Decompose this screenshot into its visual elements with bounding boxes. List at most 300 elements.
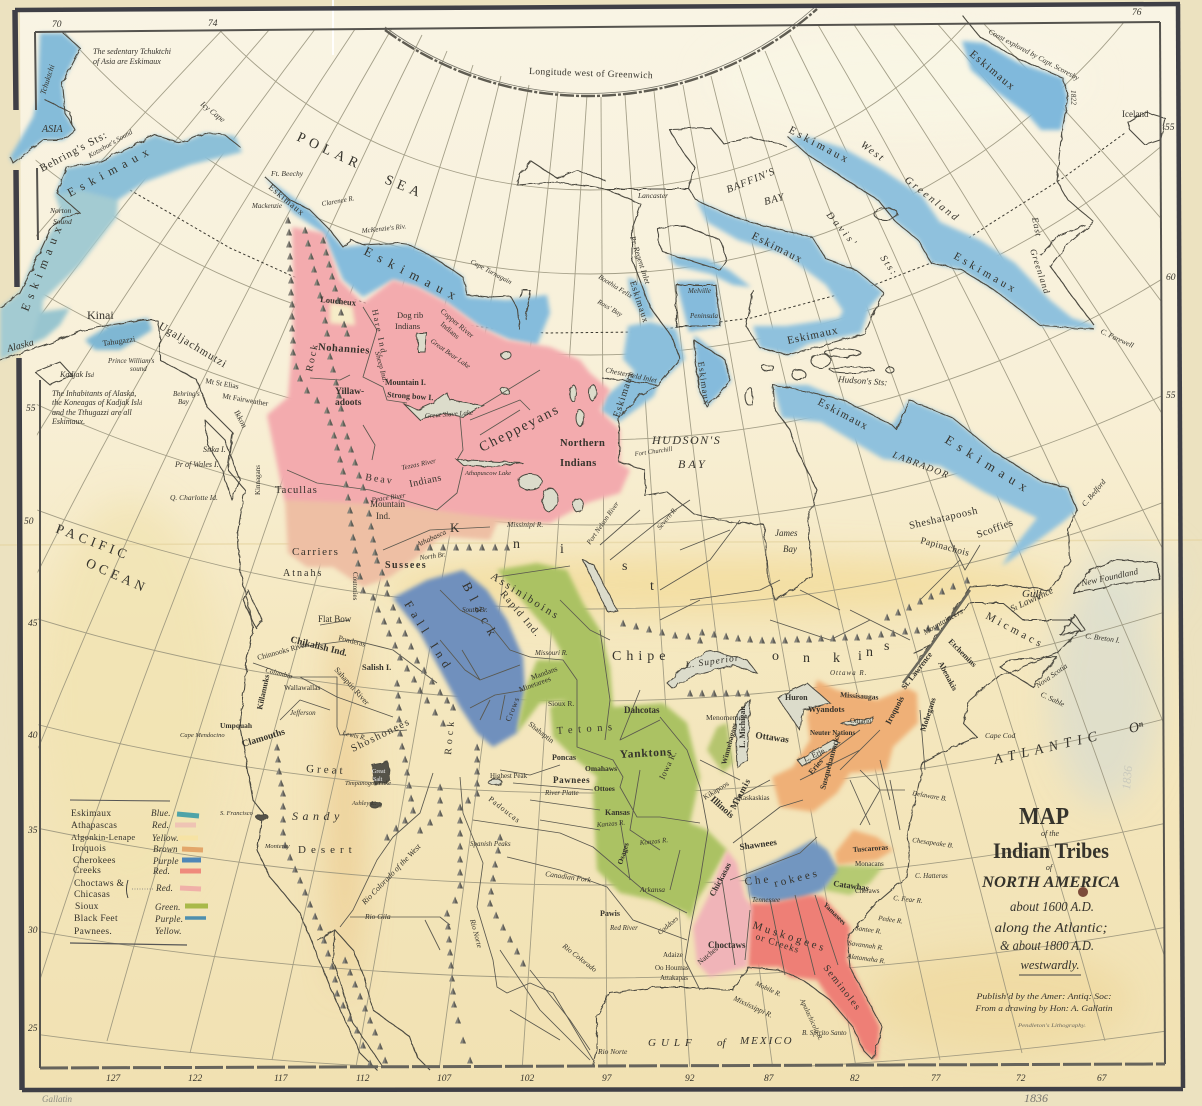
legend: tribe names: Cherokees: [73, 856, 116, 866]
labels: Far West tribes: Salish I.: [362, 662, 391, 672]
legend: [70, 800, 208, 945]
labels: Far West tribes: Rock: [443, 717, 457, 755]
labels: Alaska and the Pacific coast: and the Tthugazzi are all: [52, 408, 132, 417]
labels: Algonkin letters across Canada: k: [833, 651, 841, 666]
labels: Algonkin letters across Canada: n: [803, 651, 811, 666]
dotted arctic circle: [130, 133, 1125, 333]
labels: Far West tribes: Killamuks: [255, 674, 271, 710]
labels: Far West tribes: Rio Colorado of the West: [359, 842, 423, 907]
labels: Algonkin letters across Canada: L. Superior: [684, 654, 740, 671]
geographic labels: Greenland and Labrador: Papinachois: [919, 536, 970, 559]
labels: Eastern tribes: Catawbas: [833, 878, 870, 893]
labels: Plains tribes: Shahaptin: [527, 719, 556, 745]
labels: Eastern tribes: Kaskaskias: [738, 794, 770, 802]
labels: Athapascas tribes: Indians: [439, 320, 461, 341]
labels: Eastern tribes: Tennessee: [752, 896, 780, 904]
degree numbers: 87: [764, 1074, 775, 1084]
labels: Far West tribes: Coutonies: [351, 572, 359, 601]
legend: tribe names: Sioux: [75, 902, 99, 912]
labels: Plains tribes: Spanish Peaks: [470, 840, 511, 848]
labels: Far West tribes: Sandy: [292, 809, 344, 823]
legend: tribe names: [71, 809, 135, 937]
region: Cherokees, purple-blue: [745, 840, 838, 903]
labels: Far West tribes: Clamouths: [241, 727, 287, 750]
labels: Athapascas tribes: Tezzas River: [401, 457, 437, 472]
labels: Eastern tribes: Illinois: [708, 795, 736, 821]
seas and oceans labels: Davis': [823, 209, 860, 250]
seas and oceans labels: St Lawrence: [1009, 586, 1055, 615]
labels: Alaska and the Pacific coast: Q. Charlotte Id.: [170, 493, 218, 502]
labels: Alaska and the Pacific coast: Mackenzie: [251, 202, 282, 210]
labels: Athapascas tribes: Severn R.: [655, 505, 679, 531]
legend: colour names: Purple: [152, 856, 179, 866]
labels: Plains tribes: Osages: [615, 841, 631, 866]
handwritten margin marks: [42, 765, 1135, 1105]
labels: Plains tribes: Canadian Fork: [545, 869, 592, 884]
labels: Athapascas tribes: Indians: [560, 458, 597, 469]
geographic labels: Greenland and Labrador: C. Breton I.: [1085, 631, 1121, 645]
geographic labels: Greenland and Labrador: New Foundland: [1079, 566, 1139, 588]
seas and oceans labels: James: [775, 528, 798, 538]
geographic labels: Greenland and Labrador: East: [1030, 215, 1044, 238]
labels: Far West tribes: Rio Gila: [364, 912, 391, 921]
labels: Alaska and the Pacific coast: McKenzie's Riv.: [360, 222, 407, 235]
title block: MAP: [1019, 804, 1069, 830]
degree numbers: 55: [1166, 391, 1176, 401]
labels: Far West tribes: Chikalish Ind.: [289, 635, 348, 659]
labels: Eastern tribes: Yamasees: [822, 901, 848, 927]
labels: Alaska and the Pacific coast: Alaska: [5, 337, 35, 355]
labels: Plains tribes: [401, 570, 689, 982]
labels: Alaska and the Pacific coast: ASIA: [41, 124, 63, 135]
labels: Eastern tribes: Che: [744, 873, 772, 888]
labels: Algonkin letters across Canada: Chipe: [612, 649, 670, 664]
labels: Alaska and the Pacific coast: [5, 47, 718, 502]
seas and oceans labels: of: [717, 1037, 728, 1049]
longitude arc: [385, 7, 817, 96]
labels: Eastern tribes: Monacans: [855, 860, 884, 868]
labels: Eastern tribes: Shawnees: [739, 837, 778, 852]
labels: Plains tribes: Pawis: [600, 909, 620, 918]
labels: Far West tribes: Ashley L.: [351, 800, 377, 807]
labels: Eastern tribes: Neuter Nations: [810, 729, 855, 737]
labels: Alaska and the Pacific coast: Bay: [178, 398, 190, 406]
labels: Alaska and the Pacific coast: Kinnagans: [254, 465, 262, 495]
labels: Athapascas tribes: Yillaw-: [335, 387, 364, 397]
seas and oceans labels: Lancaster: [637, 191, 668, 200]
labels: Alaska and the Pacific coast: Behring's: [173, 390, 200, 398]
labels: Athapascas tribes: Loucheux: [320, 294, 357, 308]
labels: Alaska and the Pacific coast: Peninsula: [689, 312, 718, 320]
labels: Eastern tribes: Eries: [807, 757, 825, 776]
region: Choctaws and Chickasas, pink: [693, 850, 752, 977]
handwritten margin marks: 1836: [1119, 765, 1135, 790]
labels: Plains tribes: Crows: [504, 695, 522, 723]
title block: From a drawing by Hon: A. Gallatin: [974, 1003, 1112, 1013]
handwritten margin marks: Gallatin: [42, 1094, 73, 1104]
title block: NORTH AMERICA: [981, 874, 1120, 891]
degree numbers: 92: [685, 1074, 695, 1084]
mountain chains: [277, 220, 967, 1063]
seas and oceans labels: Oⁿ: [1128, 719, 1146, 737]
degree numbers: 35: [27, 826, 38, 836]
seas and oceans labels: BAFFIN'S: [725, 166, 777, 196]
labels: Plains tribes: Omahaws: [585, 764, 617, 773]
labels: Eastern tribes: Miamis: [728, 776, 753, 811]
labels: Eastern tribes: or Creeks: [754, 932, 801, 956]
labels: Eastern tribes: rokees: [773, 867, 821, 890]
labels: Alaska and the Pacific coast: Sound: [53, 217, 72, 226]
labels: Alaska and the Pacific coast: sound: [130, 365, 147, 373]
labels: Athapascas tribes: Hare Ind.: [370, 308, 390, 359]
degree numbers: 50: [24, 517, 34, 527]
seas and oceans labels: BAY: [678, 457, 708, 471]
seas and oceans labels: PACIFIC: [54, 521, 133, 563]
labels: Far West tribes: Columbia: [265, 666, 294, 681]
rivers: [253, 307, 980, 1060]
legend: tribe names: Iroquois: [72, 844, 106, 854]
geographic labels: Greenland and Labrador: LABRADOR: [890, 450, 951, 481]
title block: Publish'd by the Amer: Antiq: Soc:: [975, 991, 1112, 1001]
legend: colour names: Green.: [155, 902, 181, 912]
labels: Plains tribes: Minetarees: [518, 674, 552, 694]
tribe labels: Eskimaux: Eskimaux: [267, 182, 307, 218]
region: Eskimaux, blue: [0, 33, 1094, 566]
seas and oceans labels: HUDSON'S: [651, 433, 721, 447]
labels: Eastern tribes: Susquehannocks: [818, 733, 842, 791]
labels: Athapascas tribes: Northern: [560, 438, 605, 449]
geographic labels: Greenland and Labrador: Greenland: [902, 175, 962, 225]
labels: Plains tribes: Ottoes: [594, 784, 615, 793]
labels: Alaska and the Pacific coast: Prince William's: [107, 357, 155, 365]
labels: Athapascas tribes: Atnahs: [283, 568, 323, 579]
labels: Plains tribes: Pawnees: [553, 775, 590, 785]
labels: Eastern tribes: Micmacs: [984, 610, 1046, 651]
labels: Plains tribes: South Br.: [462, 606, 488, 614]
labels: Alaska and the Pacific coast: Mt St Elias: [205, 376, 240, 391]
lakes: [256, 333, 873, 820]
labels: Eastern tribes: Tuscaroras: [853, 843, 889, 854]
legend: colour names: Brown: [153, 844, 178, 854]
title block: Indian Tribes: [993, 838, 1109, 863]
labels: Eastern tribes: [696, 607, 1046, 1042]
labels: Eastern tribes: Natches: [696, 944, 720, 967]
labels: Far West tribes: Umpquah: [220, 721, 253, 730]
labels: Alaska and the Pacific coast: Norton: [49, 206, 72, 215]
title block: about 1600 A.D.: [1010, 900, 1094, 915]
labels: Athapascas tribes: Rock: [304, 342, 321, 373]
region: Sioux, green: [497, 563, 883, 920]
degree numbers: 127: [106, 1074, 122, 1084]
labels: Plains tribes: River Platte: [544, 789, 579, 797]
labels: Far West tribes: Timpanogos Lake: [345, 780, 391, 787]
degree numbers: 76: [1132, 8, 1142, 18]
labels: Alaska and the Pacific coast: Mt Fairweather: [222, 391, 269, 408]
geographic labels: Greenland and Labrador: Iceland: [1122, 109, 1149, 119]
degree numbers: 25: [28, 1024, 38, 1034]
degree numbers: 107: [437, 1074, 452, 1084]
labels: Eastern tribes: Ontario: [850, 717, 872, 725]
geographic labels: Greenland and Labrador: Nova Scotia: [1033, 661, 1069, 690]
tribe labels: Eskimaux: Eskimaux: [362, 243, 465, 306]
seas and oceans labels: BAY: [763, 192, 786, 208]
degree numbers: 30: [27, 926, 38, 936]
labels: Plains tribes: Tetons: [556, 722, 618, 737]
seas and oceans labels: Bay: [783, 544, 797, 554]
region: Athapascas, red-pink: [267, 227, 630, 587]
labels: Far West tribes: Great: [306, 763, 346, 777]
labels: Eastern tribes: Menomenies: [706, 713, 745, 722]
labels: Eastern tribes: Mountaineers: [921, 607, 964, 637]
labels: Athapascas tribes: Fort Churchill: [633, 446, 673, 458]
seas and oceans labels: Behring's Sts:: [38, 129, 110, 175]
legend: tribe names: Eskimaux: [71, 809, 111, 819]
legend: tribe names: Pawnees.: [74, 927, 112, 937]
stain on the title: [1078, 887, 1088, 897]
seas and oceans labels: POLAR: [294, 130, 365, 174]
labels: Athapascas tribes: Cheppeyans: [477, 402, 563, 456]
labels: Eastern tribes: Muskogees: [751, 919, 828, 955]
labels: Alaska and the Pacific coast: Boothia Felix: [597, 273, 634, 300]
labels: Eastern tribes: Mohegans: [918, 696, 938, 733]
labels: Algonkin letters across Canada: i: [858, 649, 863, 664]
labels: Eastern tribes: Missisaugas: [840, 690, 879, 702]
labels: Eastern tribes: Alatamaha R.: [846, 952, 886, 965]
degree numbers: 117: [274, 1074, 289, 1084]
tribe labels: Eskimaux: Eskimaux: [942, 432, 1035, 498]
labels: Athapascas tribes: Port Nelson River: [585, 500, 621, 547]
labels: Plains tribes: Red River: [609, 924, 638, 932]
seas and oceans labels: GULF: [648, 1037, 697, 1049]
labels: Eastern tribes: Wyandots: [808, 704, 845, 714]
labels: Eastern tribes: Winnebagoes: [719, 722, 739, 766]
legend: tribe names: Creeks: [73, 866, 101, 876]
labels: Algonkin letters across Canada: Ottawa R.: [830, 669, 867, 677]
handwritten margin marks: 1836: [1024, 1091, 1048, 1105]
labels: Athapascas tribes: Great Slave Lake: [425, 409, 473, 420]
seas and oceans labels: ATLANTIC: [992, 728, 1104, 768]
labels: Eastern tribes: B. Spirito Santo: [802, 1029, 847, 1037]
legend: colour names: Blue.: [151, 808, 171, 818]
geographic labels: Greenland and Labrador: Greenland: [1028, 248, 1052, 295]
labels: Athapascas tribes: Great Bear Lake: [429, 337, 472, 370]
legend: tribe names: Algonkin-Lenape: [71, 832, 135, 842]
degree numbers: 70: [52, 20, 62, 30]
labels: Athapascas tribes: Dog rib: [397, 310, 423, 320]
degree numbers: 45: [28, 619, 38, 629]
labels: Athapascas tribes: Carriers: [292, 546, 339, 558]
labels: Far West tribes: Sahaptin River: [333, 665, 371, 707]
labels: Plains tribes: Mandans: [530, 664, 559, 682]
geographic labels: Greenland and Labrador: 1822: [1069, 90, 1079, 105]
labels: Alaska and the Pacific coast: Ugaljachmutzi: [156, 320, 229, 371]
labels: Eastern tribes: Iroquois: [883, 694, 906, 726]
geographic labels: Greenland and Labrador: Sheshatapoosh: [908, 505, 979, 532]
legend: colour names: Purple.: [154, 914, 183, 924]
title block: of: [1046, 863, 1054, 872]
tribe labels: Eskimaux: Eskimaux: [967, 48, 1018, 93]
title block: westwardly.: [1020, 957, 1080, 972]
labels: Plains tribes: Highest Peak: [490, 772, 528, 780]
labels: Alaska and the Pacific coast: Clarence R.: [321, 194, 355, 208]
geographic labels: Greenland and Labrador: West: [858, 140, 887, 165]
labels: Algonkin letters across Canada: i: [560, 542, 565, 557]
geographic labels: Greenland and Labrador: C. Bedford: [1080, 477, 1108, 508]
labels: Plains tribes: Caddoes: [656, 914, 680, 937]
tribe labels: Eskimaux: Eskimaux: [786, 324, 839, 347]
labels: Alaska and the Pacific coast: Kinai: [87, 308, 114, 322]
labels: Far West tribes: Wallawallas: [284, 683, 321, 692]
geographic labels: Greenland and Labrador: [858, 27, 1149, 740]
degree numbers: 55: [1165, 123, 1175, 133]
geographic labels: Greenland and Labrador: C. Farewell: [1099, 327, 1135, 350]
labels: Plains tribes: Arkansa: [639, 885, 665, 894]
labels: Alaska and the Pacific coast: Melville: [687, 287, 711, 295]
labels: Far West tribes: S. Francisco: [220, 810, 254, 817]
labels: Plains tribes: Attakapas: [660, 974, 688, 982]
tribe labels: Eskimaux: Eskimaux: [787, 124, 852, 167]
labels: Algonkin letters across Canada: [450, 520, 890, 677]
labels: Far West tribes: Desert: [298, 844, 357, 856]
legend: colour names: Red.: [155, 883, 173, 893]
labels: Athapascas tribes: Peace River: [370, 491, 406, 504]
tribe labels: Eskimaux: Eskimaux: [952, 250, 1020, 297]
labels: Eastern tribes: Choctaws: [708, 940, 746, 950]
seas and oceans labels: SEA: [383, 173, 427, 202]
labels: Plains tribes: Kansas: [605, 808, 630, 817]
title block: Pendleton's Lithography.: [1017, 1023, 1086, 1029]
degree numbers: 67: [1097, 1074, 1108, 1084]
labels: Far West tribes: Ponderas: [338, 633, 366, 649]
labels: Plains tribes: Fall Ind: [401, 598, 457, 675]
labels: Eastern tribes: L. Michigan: [738, 706, 747, 748]
seas and oceans labels: MEXICO: [739, 1035, 794, 1047]
tribe labels: Eskimaux: Eskimaux: [611, 370, 637, 419]
labels: Algonkin letters across Canada: t: [650, 579, 655, 594]
tribe labels: Eskimaux: Eskimaux: [18, 219, 67, 313]
legend: tribe names: Black Feet: [74, 914, 118, 924]
region: Black Feet, purple-blue: [393, 570, 525, 747]
labels: Alaska and the Pacific coast: of Asia are Eskimaux: [93, 57, 161, 66]
legend: tribe names: Chicasas: [74, 890, 110, 900]
labels: Alaska and the Pacific coast: Kotzebue's Sound: [86, 128, 134, 160]
labels: Eastern tribes: Pedee R.: [877, 914, 904, 925]
degree numbers: 74: [208, 19, 218, 29]
labels: Athapascas tribes: Tacullas: [275, 485, 318, 496]
labels: Plains tribes: Missouri R.: [534, 649, 568, 657]
degree numbers: 112: [356, 1074, 370, 1084]
labels: Alaska and the Pacific coast: the Koneagas of Kadjak Isld: [52, 398, 143, 407]
labels: Plains tribes: Assiniboins: [488, 570, 562, 623]
labels: Eastern tribes: Ottawas: [755, 731, 790, 746]
degree numbers: 60: [1166, 273, 1176, 283]
labels: Alaska and the Pacific coast: Ft. Beechy: [270, 169, 304, 178]
labels: Eastern tribes: Cheraws: [855, 887, 880, 895]
labels: Alaska and the Pacific coast: The Inhabitants of Alaska,: [52, 389, 136, 398]
labels: Far West tribes: Great: [372, 769, 386, 775]
tribe labels: Eskimaux: Eskimaux: [816, 396, 871, 433]
legend: colour names: Yellow.: [152, 833, 179, 843]
labels: Eastern tribes: St. Lawrence: [899, 650, 934, 691]
seas and oceans labels: Longitude west of Greenwich: [529, 66, 653, 81]
labels: Eastern tribes: Huron: [785, 693, 808, 702]
labels: Eastern tribes: Chickasas: [707, 860, 733, 898]
labels: Athapascas tribes: Sheep Ind.: [373, 350, 390, 383]
labels: Plains tribes: Iowa R.: [657, 749, 679, 781]
labels: Eastern tribes: Seminoles: [821, 963, 863, 1013]
geographic labels: Greenland and Labrador: Scoffies: [975, 517, 1015, 541]
labels: Eastern tribes: Mississippi R.: [731, 993, 774, 1020]
labels: Far West tribes: Flat Bow: [318, 614, 352, 624]
degree numbers: 72: [1016, 1074, 1026, 1084]
legend: colour names: Red.: [152, 866, 170, 876]
labels: Far West tribes: Salt: [373, 777, 383, 783]
labels: Plains tribes: Black: [459, 579, 503, 644]
labels: Athapascas tribes: Ind.: [376, 511, 390, 521]
labels: Alaska and the Pacific coast: Tahugazzi: [102, 334, 136, 348]
labels: Alaska and the Pacific coast: Ross' Bay: [595, 297, 624, 319]
legend: tribe names: Athapascas: [71, 821, 117, 831]
seas and oceans labels: OCEAN: [84, 555, 151, 596]
legend: colour names: [151, 808, 183, 936]
region: Creeks, red: [748, 895, 880, 1060]
degree numbers: 40: [28, 731, 38, 741]
labels: Far West tribes: Lewis R.: [341, 729, 367, 742]
legend: bracket: [126, 880, 154, 898]
title block: along the Atlantic;: [994, 921, 1108, 936]
labels: Alaska and the Pacific coast: Tchuktchi: [38, 64, 56, 96]
degree numbers: 122: [188, 1074, 202, 1084]
labels: Plains tribes: Poncas: [552, 753, 576, 762]
labels: Athapascas tribes: Beav: [365, 472, 394, 487]
labels: Far West tribes: Chinnooks River: [256, 640, 308, 662]
title block: [974, 804, 1120, 1029]
labels: Athapascas tribes: Mountain I.: [385, 378, 426, 387]
labels: Far West tribes: Jefferson: [290, 709, 316, 717]
labels: Alaska and the Pacific coast: Sitka I.: [203, 445, 226, 454]
degree numbers: 77: [931, 1074, 942, 1084]
legend: tribe names: Choctaws &: [74, 879, 125, 889]
labels: Far West tribes: Shoshonees: [349, 716, 412, 755]
labels: Algonkin letters across Canada: s: [884, 639, 890, 654]
labels: Eastern tribes: Kikapoos: [701, 779, 731, 802]
tribe labels: Eskimaux: Eskimaux: [65, 142, 156, 200]
labels: Algonkin letters across Canada: n: [513, 537, 521, 552]
labels: Athapascas tribes: Copper River: [439, 307, 476, 340]
title block: & about 1800 A.D.: [1000, 938, 1094, 953]
geographic labels: Greenland and Labrador: Cape Cod: [985, 731, 1015, 740]
title block: of the: [1041, 829, 1059, 838]
seas and oceans labels: Pr. Regent Inlet: [628, 234, 652, 286]
labels: Athapascas tribes: [275, 294, 679, 579]
labels: Athapascas tribes: adoots: [335, 398, 362, 408]
labels: Athapascas tribes: Strong bow I.: [387, 390, 434, 402]
legend: colour names: Yellow.: [155, 926, 182, 936]
seas and oceans labels: Chesterfield Inlet: [605, 365, 658, 385]
labels: Algonkin letters across Canada: n: [866, 645, 874, 660]
labels: Plains tribes: Rapid Ind.: [498, 589, 543, 640]
labels: Athapascas tribes: Athapuscow Lake: [464, 470, 511, 477]
labels: Alaska and the Pacific coast: Cape Turnagain: [469, 258, 514, 286]
labels: Algonkin letters across Canada: o: [772, 649, 780, 664]
labels: Algonkin letters across Canada: K: [450, 520, 460, 535]
labels: Algonkin letters across Canada: s: [622, 559, 628, 574]
labels: Plains tribes: Kanzas R.: [595, 819, 626, 829]
labels: Eastern tribes: Chesapeake B.: [912, 836, 954, 850]
labels: Athapascas tribes: North Br.: [418, 550, 446, 562]
labels: Eastern tribes: C. Hatteras: [915, 872, 948, 880]
labels: Athapascas tribes: Missinipi R.: [506, 520, 543, 529]
